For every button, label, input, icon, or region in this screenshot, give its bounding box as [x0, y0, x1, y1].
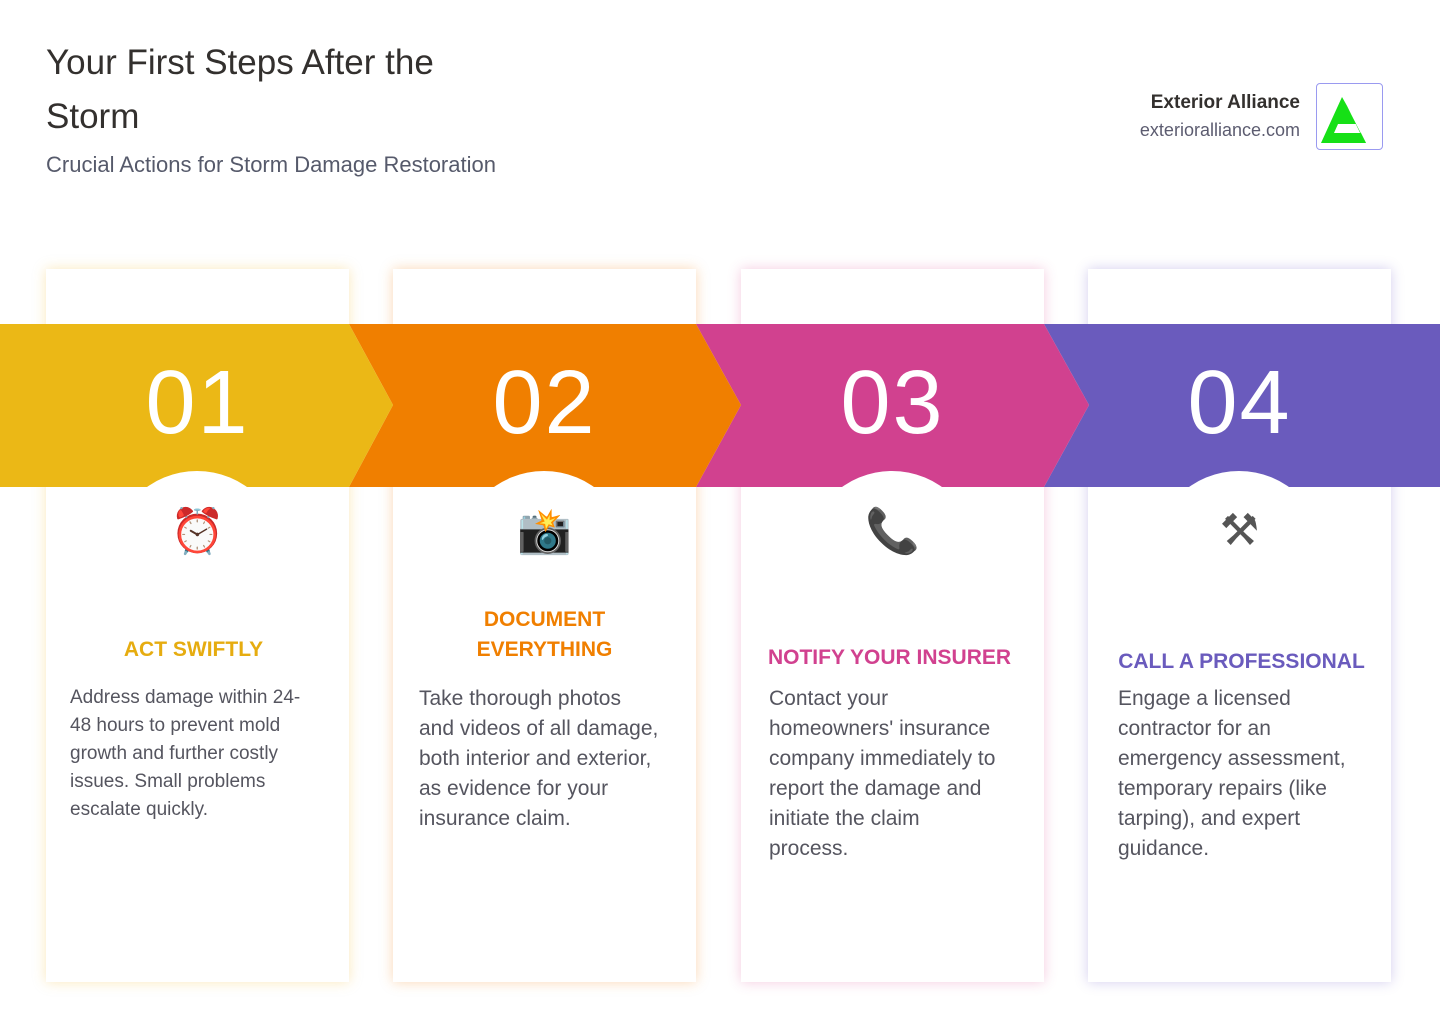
cards: [46, 269, 349, 982]
subtitle: Crucial Actions for Storm Damage Restoration: [46, 152, 496, 177]
text: Address damage within 24-: [70, 687, 300, 708]
text: homeowners' insurance: [769, 717, 990, 740]
text: 04: [1187, 353, 1292, 453]
brand name: Exterior Alliance: [1151, 92, 1300, 113]
arrow band: [0, 324, 1440, 487]
step 2: DOCUMENT: [484, 608, 605, 631]
text: ⚒: [1220, 506, 1259, 555]
text: growth and further costly: [70, 743, 278, 764]
text: both interior and exterior,: [419, 747, 651, 770]
text: temporary repairs (like: [1118, 777, 1327, 800]
text: 03: [840, 353, 945, 453]
text: company immediately to: [769, 747, 995, 770]
text: insurance claim.: [419, 807, 571, 830]
step 2: EVERYTHING: [477, 638, 612, 661]
step 4: CALL A PROFESSIONAL: [1118, 650, 1365, 673]
title: Your First Steps After the Storm: [46, 43, 434, 136]
step 1: ACT SWIFTLY: [124, 638, 263, 661]
text: contractor for an: [1118, 717, 1271, 740]
step 2: [477, 608, 612, 661]
text: 02: [492, 353, 597, 453]
icons: ⏰: [170, 507, 225, 556]
text: escalate quickly.: [70, 799, 208, 820]
text: 📞: [865, 507, 920, 556]
text: process.: [769, 837, 848, 860]
logo: [1316, 83, 1383, 150]
step 3: NOTIFY YOUR INSURER: [768, 646, 1011, 669]
brand block: [1140, 83, 1383, 150]
text: 48 hours to prevent mold: [70, 715, 280, 736]
text: Take thorough photos: [419, 687, 621, 710]
text: as evidence for your: [419, 777, 608, 800]
brand url: exterioralliance.com: [1140, 120, 1300, 140]
text: tarping), and expert: [1118, 807, 1300, 830]
text: 📸: [517, 507, 572, 556]
text: and videos of all damage,: [419, 717, 658, 740]
text: issues. Small problems: [70, 771, 265, 792]
text: guidance.: [1118, 837, 1209, 860]
text: report the damage and: [769, 777, 981, 800]
text: initiate the claim: [769, 807, 920, 830]
text: Engage a licensed: [1118, 687, 1291, 710]
text: Contact your: [769, 687, 888, 710]
text: emergency assessment,: [1118, 747, 1346, 770]
numbers: 01: [145, 353, 250, 453]
